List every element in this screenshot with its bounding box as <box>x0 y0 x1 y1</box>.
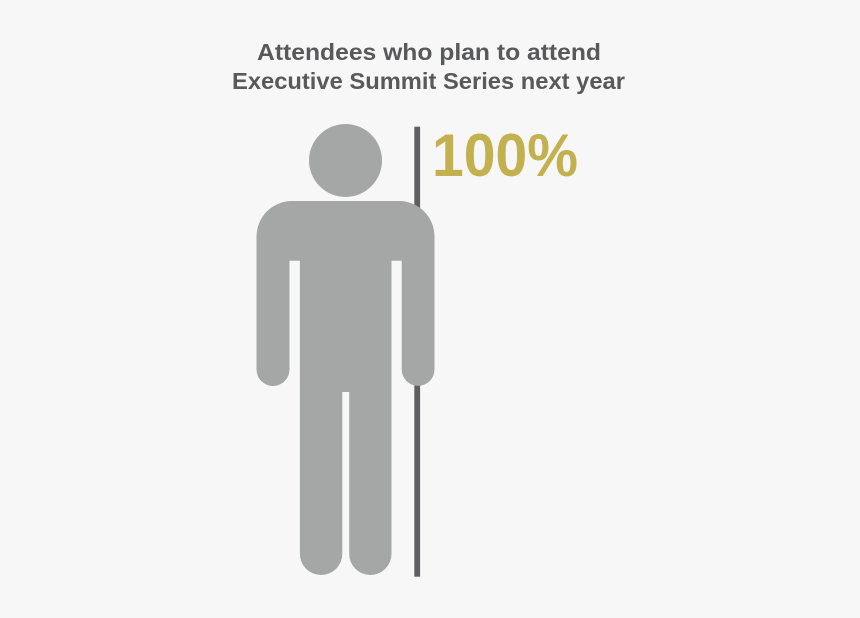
percentage value: 100% <box>432 122 578 189</box>
person head <box>309 124 382 197</box>
title <box>232 39 625 94</box>
title: Executive Summit Series next year <box>232 68 625 94</box>
scale bar <box>414 127 420 577</box>
title: Attendees who plan to attend <box>257 39 601 65</box>
person body <box>256 201 434 575</box>
icon: person <box>256 124 434 575</box>
